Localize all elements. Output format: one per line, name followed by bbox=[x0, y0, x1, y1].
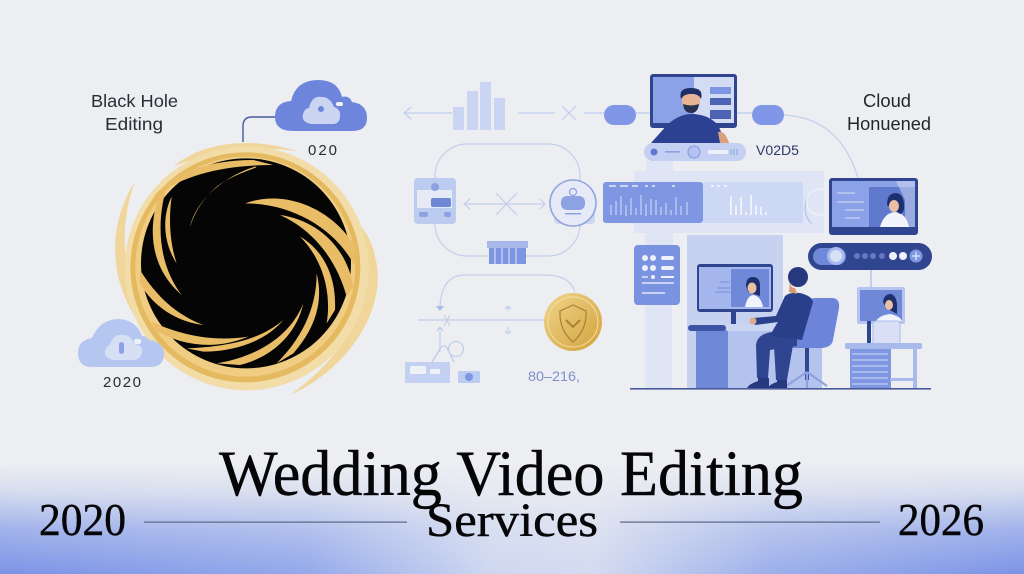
wisps bbox=[115, 143, 378, 395]
title: Wedding Video Editing bbox=[219, 438, 803, 510]
icon: robot badge bbox=[550, 180, 596, 226]
monitor: top with editor bbox=[650, 74, 737, 143]
connector: cloud to black hole bbox=[243, 117, 278, 142]
title bbox=[219, 438, 803, 547]
connector pills to monitor bbox=[636, 112, 752, 114]
title: Services bbox=[426, 494, 598, 547]
icon: basket bbox=[487, 241, 528, 264]
black hole bbox=[115, 143, 378, 395]
label: V02D5: V02D5 bbox=[756, 142, 799, 158]
lower flow and shield coin bbox=[405, 275, 602, 384]
floor line bbox=[630, 388, 931, 390]
label: cloud honuened: Honuened bbox=[847, 114, 931, 134]
label: cloud honuened bbox=[847, 91, 931, 134]
icon: card bbox=[414, 178, 456, 224]
top flow: bar chart and arrows bbox=[404, 82, 604, 130]
person at desk bbox=[747, 267, 813, 388]
label: black hole editing: Editing bbox=[105, 114, 163, 134]
curved link to right monitor bbox=[784, 115, 858, 178]
control bar bbox=[644, 143, 746, 161]
background bbox=[0, 475, 1024, 574]
icon: lab equipment bbox=[405, 342, 480, 383]
dark control pill bbox=[808, 243, 932, 270]
label: 020: 020 bbox=[308, 142, 337, 159]
footer: line right bbox=[620, 522, 880, 523]
monitor: right with woman bbox=[829, 178, 918, 235]
second workstation bbox=[845, 270, 922, 388]
icon: gold shield coin bbox=[544, 293, 602, 351]
label: cloud honuened: Cloud bbox=[863, 91, 911, 111]
pills bbox=[604, 105, 784, 125]
gold arms bbox=[140, 160, 355, 365]
desk bbox=[688, 324, 822, 388]
central light panel bbox=[603, 161, 833, 251]
loop diagram bbox=[414, 144, 596, 264]
label: 2020: 2020 bbox=[103, 374, 141, 391]
footer: year left: 2020 bbox=[39, 494, 126, 545]
chair bbox=[775, 298, 839, 389]
icon: cloud bottom bbox=[78, 319, 164, 367]
back wall bbox=[687, 235, 783, 388]
footer: year right: 2026 bbox=[898, 494, 984, 545]
label: 80-216: 80–216, bbox=[528, 368, 580, 384]
left menu card bbox=[634, 235, 680, 388]
icon: cloud top bbox=[275, 80, 367, 131]
footer: line left bbox=[144, 522, 407, 523]
monitor: desk bbox=[697, 264, 773, 326]
label: black hole editing bbox=[91, 91, 178, 134]
label: black hole editing: Black Hole bbox=[91, 91, 178, 111]
